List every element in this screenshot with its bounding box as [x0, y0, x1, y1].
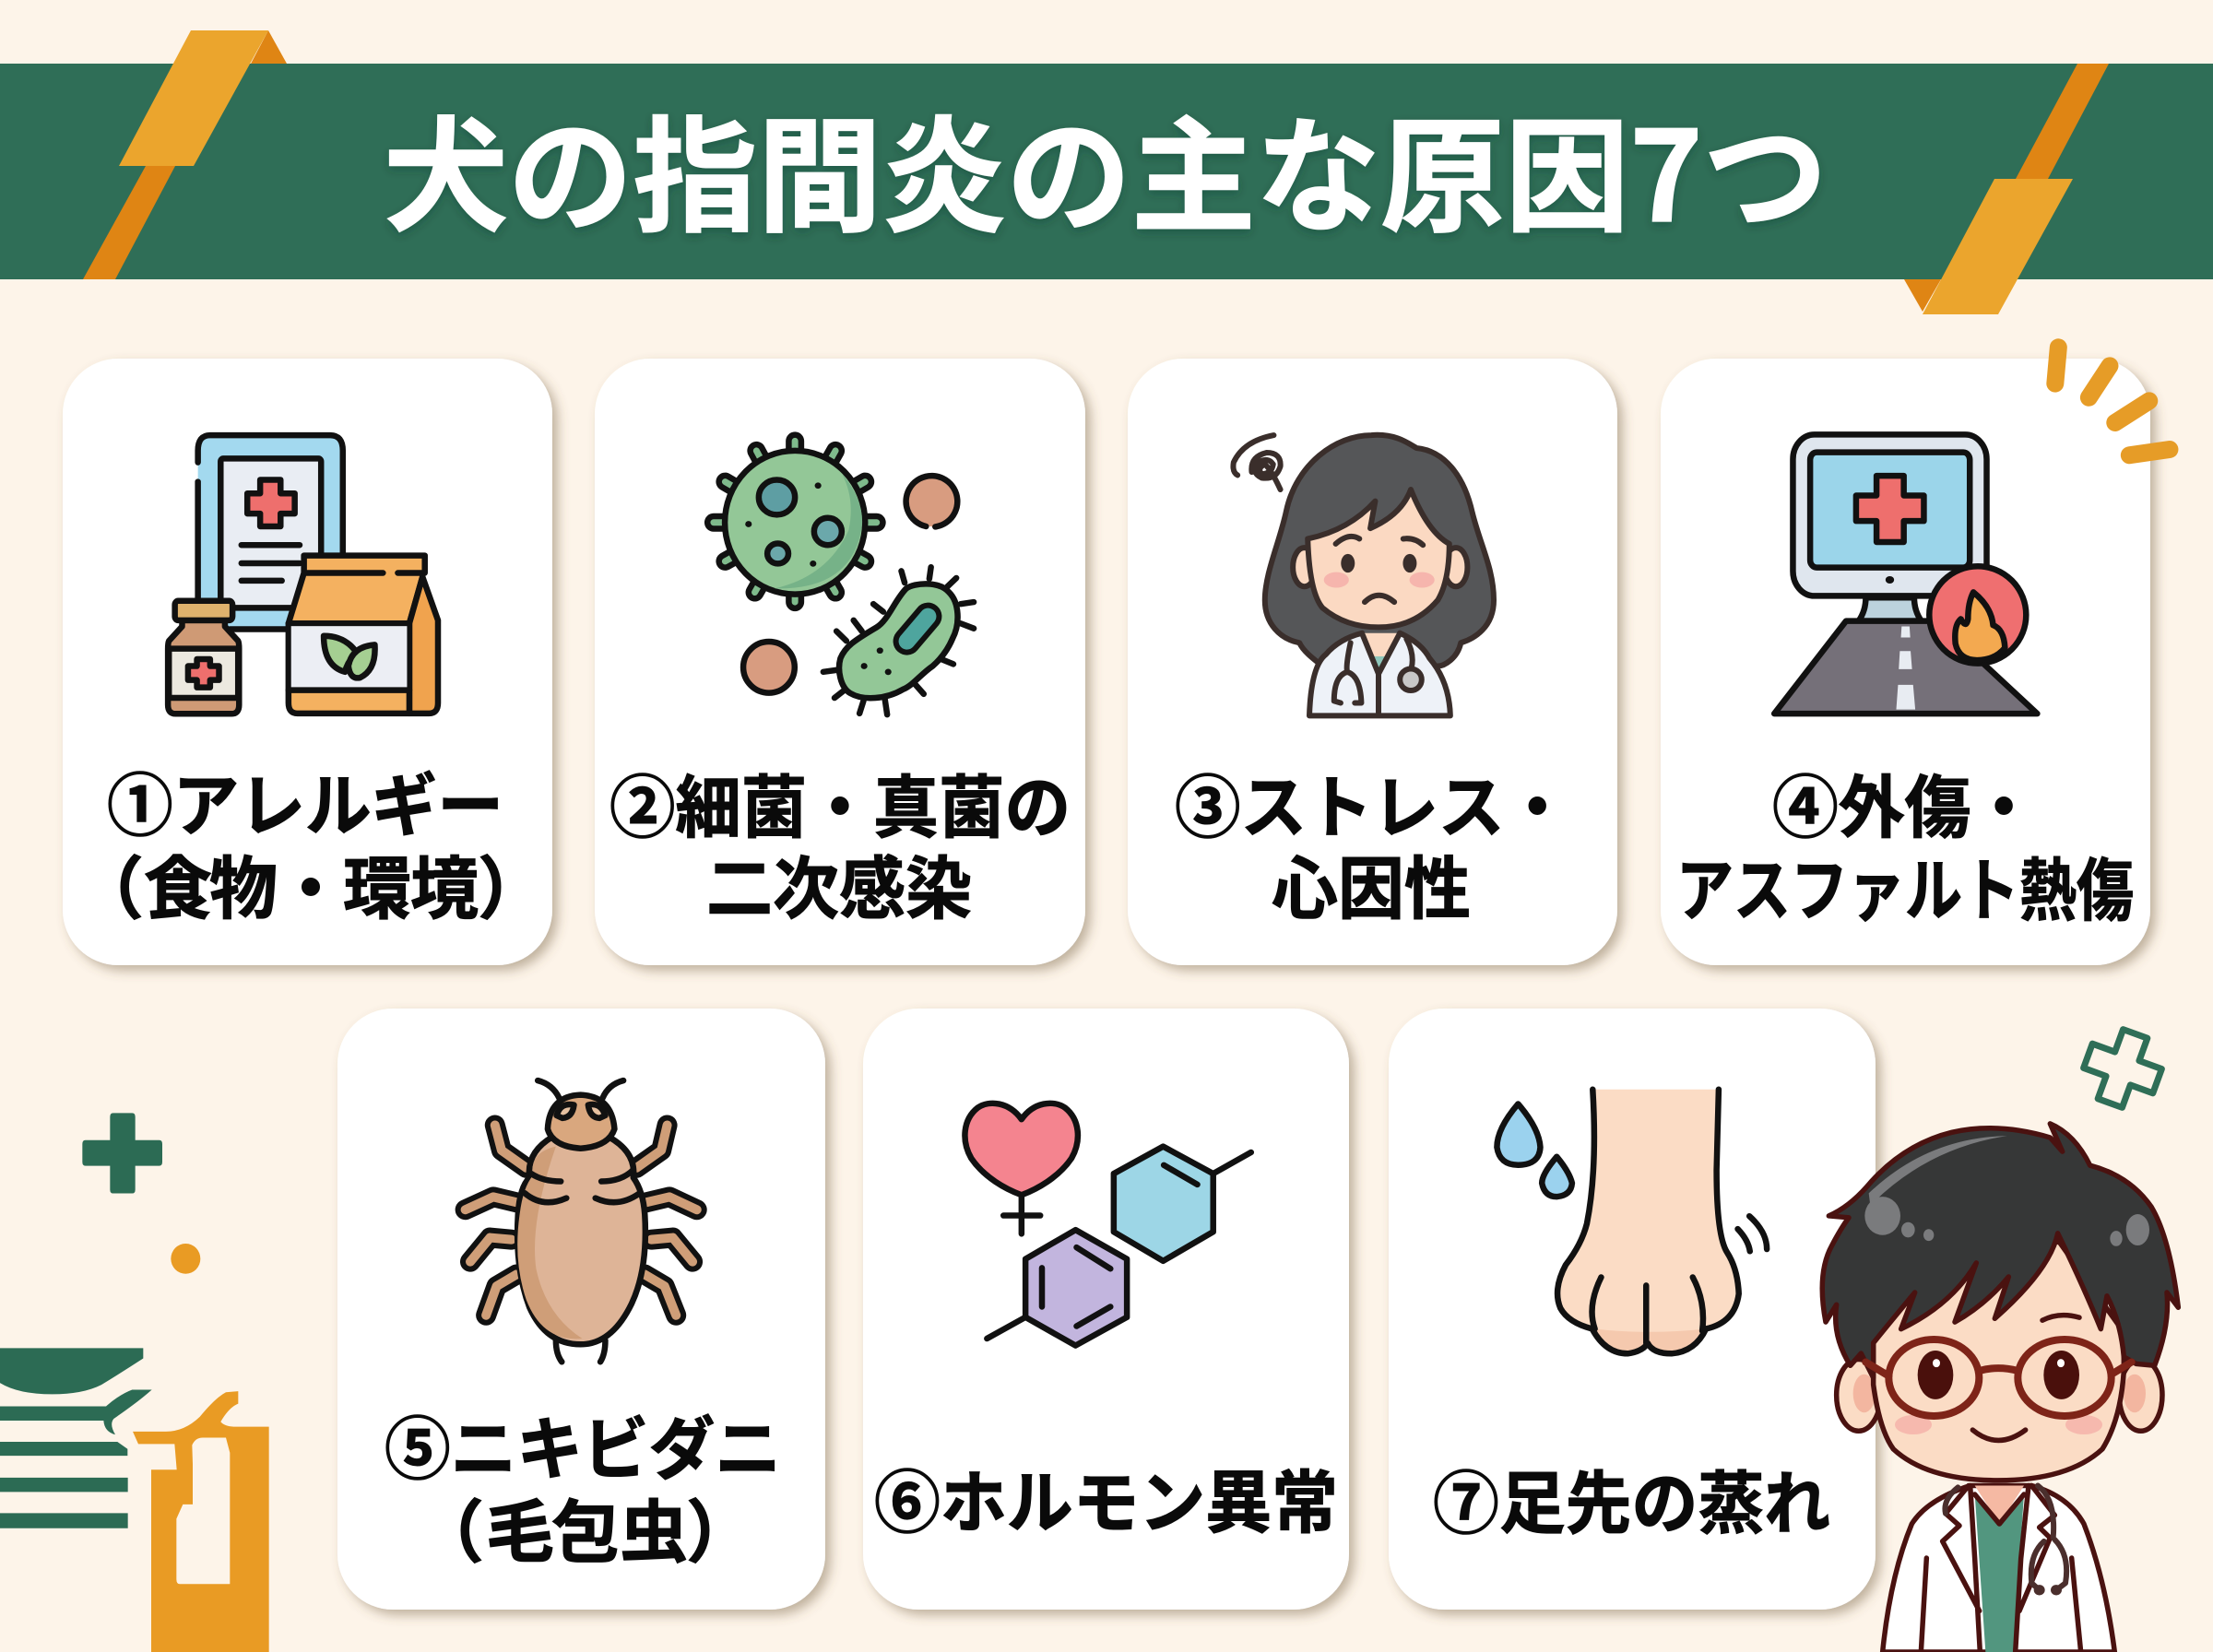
label 4: [1676, 770, 2134, 929]
label 2: ②細菌・真菌の: [609, 770, 1071, 846]
label 5: （毛包虫）: [416, 1494, 754, 1571]
icon: heart with female sign and molecules: [964, 1103, 1251, 1346]
icon: worried doctor: [1233, 435, 1494, 715]
label 6: ⑥ホルモン異常: [874, 1465, 1338, 1541]
label 3: [1175, 770, 1570, 927]
icon: paw with sweat drops: [1497, 1090, 1767, 1353]
label 1: （食物・環境）: [76, 851, 546, 927]
title banner: [0, 30, 2213, 314]
orange bottle shape: [133, 1391, 269, 1652]
panel: cause 7 moist paws: [1389, 1009, 1876, 1610]
orange dot: [171, 1244, 200, 1274]
label 5: [385, 1411, 781, 1571]
label 2: [609, 770, 1071, 927]
decoration: bottom left shapes: [0, 1113, 269, 1652]
label 4: ④外傷・: [1772, 770, 2037, 846]
label 1: [76, 768, 546, 927]
green leaf and stripes: [0, 1348, 152, 1528]
card 6 background: [863, 1009, 1349, 1610]
panel: cause 3 stress: [1128, 359, 1617, 965]
icon: monitor, road and flame: [1774, 434, 2037, 714]
icon: green cross: [82, 1113, 162, 1194]
label 4: アスファルト熱傷: [1676, 853, 2134, 929]
doctor character: [1822, 1124, 2178, 1652]
label 1: ①アレルギー: [107, 768, 503, 844]
panel: cause 4 trauma and burn: [1661, 359, 2150, 965]
label 3: 心因性: [1272, 851, 1471, 927]
card 5 background: [337, 1009, 825, 1610]
icon: outlined green cross: [2076, 1021, 2170, 1115]
card 7 background: [1389, 1009, 1876, 1610]
panel: cause 6 hormones: [863, 1009, 1349, 1610]
panel: cause 2 infection: [595, 359, 1085, 965]
label 2: 二次感染: [706, 851, 972, 927]
panel: cause 5 demodex mite: [337, 1009, 825, 1610]
card 3 background: [1128, 359, 1617, 965]
card 2 background: [595, 359, 1085, 965]
label 7: ⑦足先の蒸れ: [1433, 1466, 1830, 1542]
icon: mite: [466, 1080, 697, 1362]
label 3: ③ストレス・: [1175, 770, 1570, 846]
label 5: ⑤ニキビダニ: [385, 1411, 781, 1488]
icon: medical chart, bottle and food bag: [168, 435, 438, 714]
ribbon: top left: [83, 30, 287, 279]
title: 犬の指間炎の主な原因7つ: [384, 77, 1828, 258]
decorative rays: [2055, 348, 2170, 455]
card 1 background: [63, 359, 552, 965]
icon: bacteria and fungi: [714, 441, 974, 714]
card 4 background: [1661, 359, 2150, 965]
panel: cause 1 allergy: [63, 359, 552, 965]
ribbon: bottom right: [1904, 64, 2109, 314]
